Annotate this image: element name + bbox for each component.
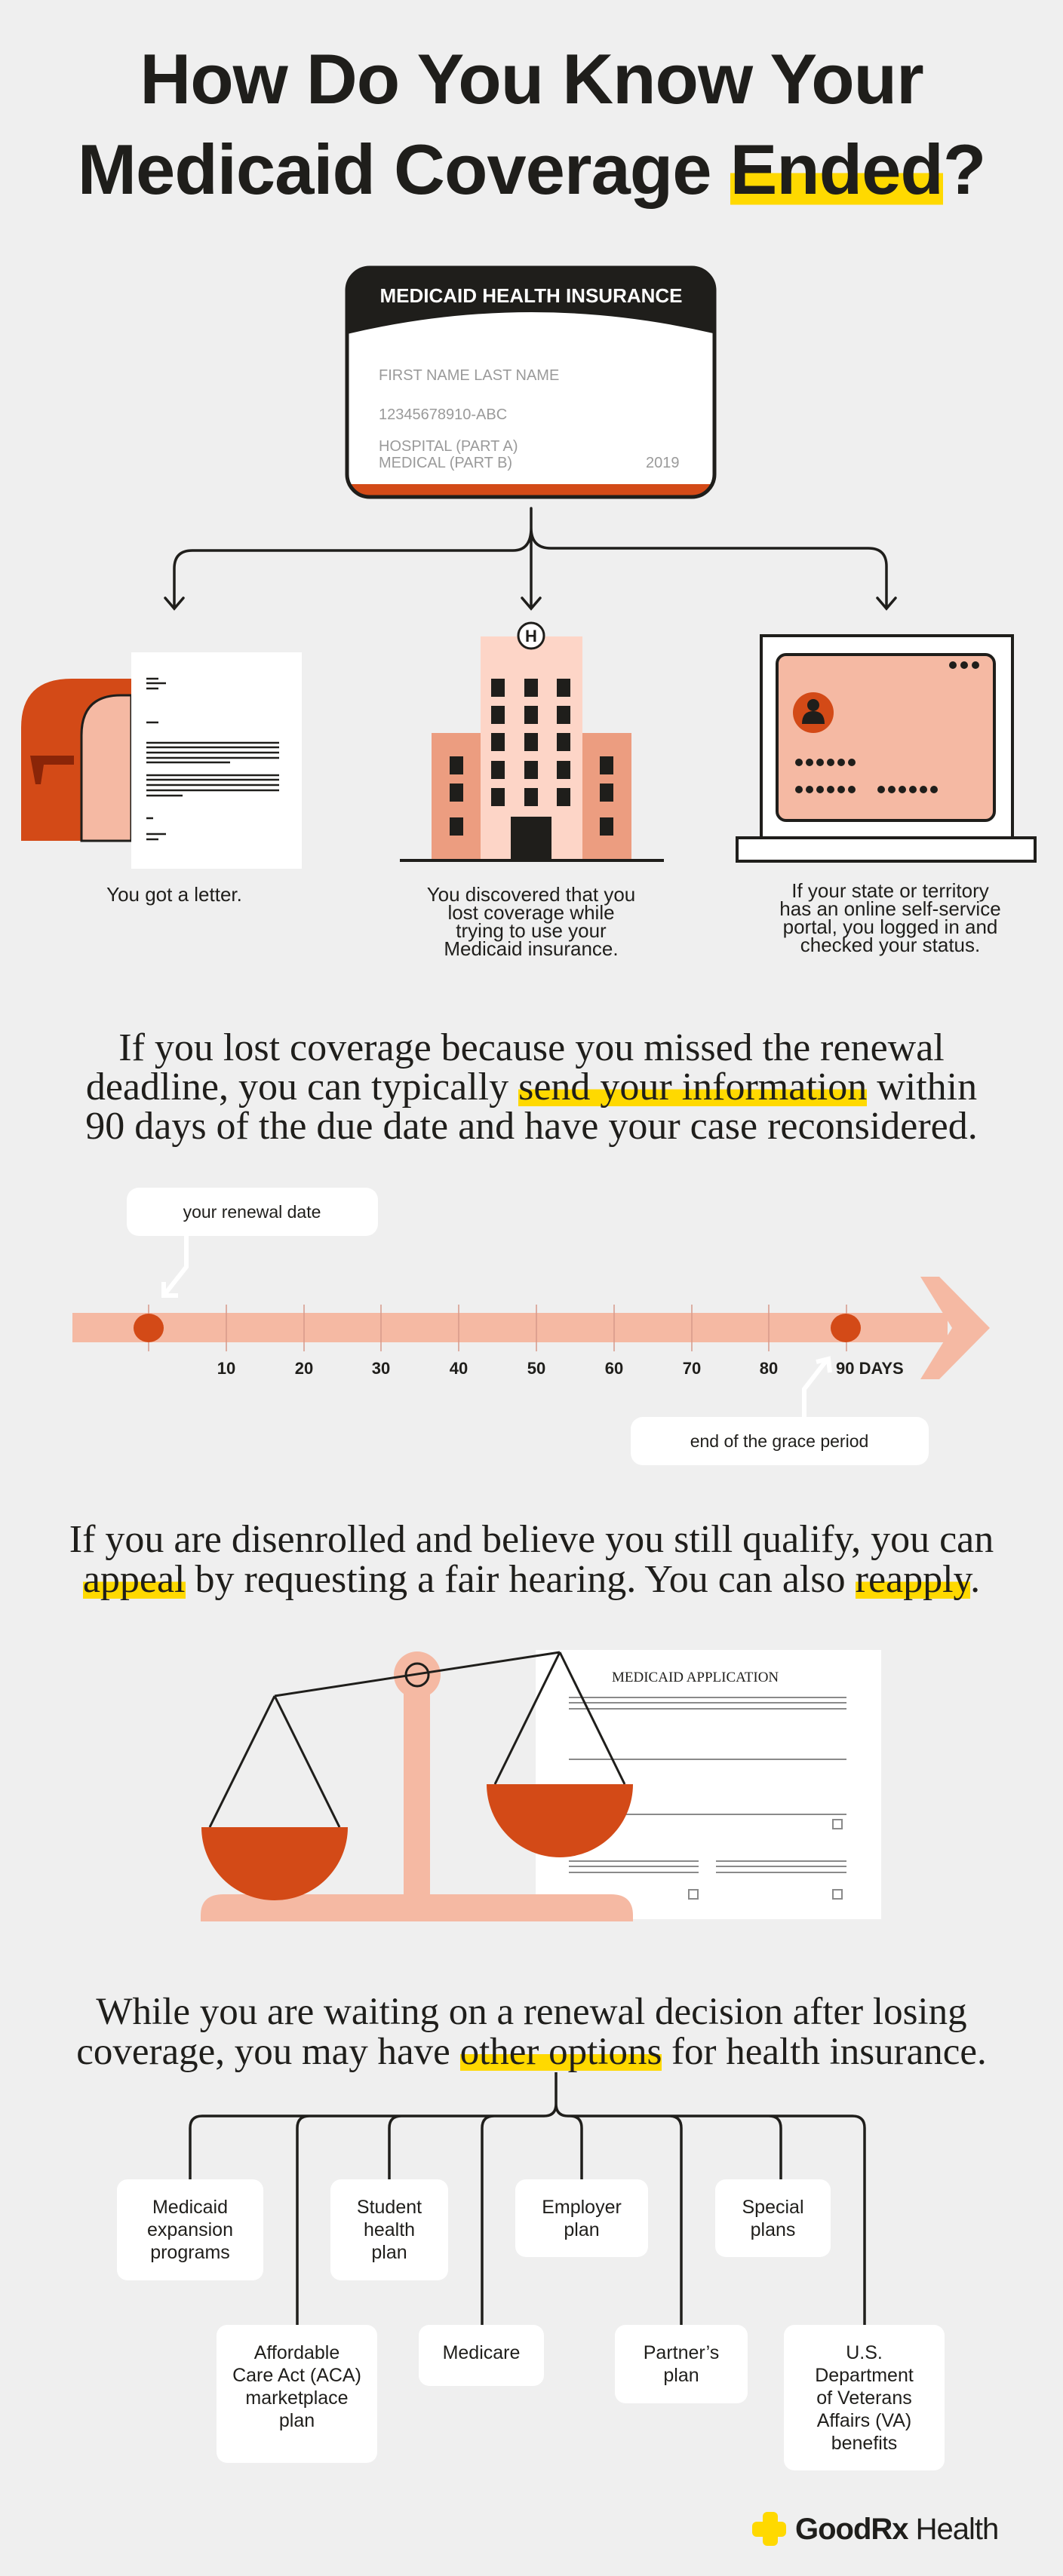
caption: letter: You got a letter.: [106, 883, 242, 906]
caption: portal: portal, you logged in and: [783, 915, 997, 938]
icon: mailbox and letter: [21, 652, 302, 869]
text: renewal deadline: deadline, you can typically send your information within: [86, 1066, 977, 1109]
option boxes: [117, 2179, 945, 2470]
option: VA benefits: Department: [815, 2365, 914, 2386]
callout: your renewal date: your renewal date: [183, 1202, 321, 1222]
option: Special plans: Special: [742, 2197, 804, 2218]
caption: hospital: trying to use your: [456, 919, 607, 942]
option: ACA marketplace: Affordable: [254, 2342, 339, 2363]
insurance card: FIRST NAME LAST NAME: [379, 367, 559, 384]
option: Medicaid expansion: programs: [150, 2242, 230, 2263]
text: renewal deadline: 90 days of the due date and have your case reconsidered.: [85, 1105, 978, 1148]
option: Medicaid expansion: [117, 2179, 263, 2280]
option: ACA marketplace: [217, 2325, 377, 2463]
caption: portal: has an online self-service: [779, 897, 1001, 920]
text: renewal deadline: If you lost coverage because you missed the renewal: [118, 1026, 945, 1069]
timeline arrow: 50: [527, 1359, 545, 1378]
option: VA benefits: of Veterans: [816, 2387, 912, 2409]
caption: hospital: You discovered that you: [427, 883, 635, 906]
insurance card: [346, 265, 717, 499]
timeline arrow: 90 DAYS: [836, 1359, 904, 1378]
title: Medicaid Coverage Ended?: [78, 130, 985, 209]
option: Student health plan: plan: [371, 2242, 407, 2263]
option: VA benefits: benefits: [831, 2433, 897, 2454]
timeline arrow: 20: [295, 1359, 313, 1378]
option: ACA marketplace: marketplace: [245, 2387, 349, 2409]
option: ACA marketplace: Care Act (ACA): [232, 2365, 361, 2386]
insurance card: 12345678910-ABC: [379, 406, 507, 423]
icon: hospital: H: [525, 627, 537, 646]
text: renewal deadline: [85, 1026, 978, 1148]
option: Partner's plan: Partner’s: [644, 2342, 719, 2363]
icon: laptop portal: [737, 636, 1035, 861]
insurance card: 2019: [646, 455, 679, 471]
title: How Do You Know Your: [140, 39, 923, 118]
timeline arrow: 40: [450, 1359, 468, 1378]
callout: your renewal date: [127, 1188, 378, 1296]
callout: end of the grace period: end of the grace period: [690, 1431, 868, 1451]
text: appeal: [69, 1518, 994, 1601]
text: other options: coverage, you may have other options for health insurance.: [76, 2031, 987, 2073]
icon: hospital: [400, 623, 664, 860]
logo mark: [752, 2512, 786, 2546]
option: Student health plan: [330, 2179, 448, 2280]
insurance card: MEDICAL (PART B): [379, 455, 512, 471]
timeline arrow: 60: [605, 1359, 623, 1378]
timeline arrow: [72, 1277, 990, 1379]
insurance card: HOSPITAL (PART A): [379, 438, 518, 455]
option: Partner's plan: plan: [663, 2365, 699, 2386]
medicaid application document: [536, 1650, 881, 1919]
caption: portal: [779, 879, 1001, 956]
timeline arrow: 10: [217, 1359, 235, 1378]
callout: end of the grace period: [631, 1359, 929, 1465]
option: Medicare: Medicare: [443, 2342, 520, 2363]
option: VA benefits: U.S.: [846, 2342, 883, 2363]
arrows: card to three scenarios: [165, 508, 896, 609]
option: VA benefits: [784, 2325, 945, 2470]
insurance card: MEDICAID HEALTH INSURANCE: [379, 284, 683, 307]
option: Medicare: [419, 2325, 544, 2386]
text: appeal: If you are disenrolled and believe you still qualify, you can: [69, 1518, 994, 1561]
option: Student health plan: Student: [357, 2197, 422, 2218]
caption: hospital: [427, 883, 635, 960]
option: Student health plan: health: [364, 2219, 415, 2240]
timeline arrow: 80: [760, 1359, 778, 1378]
medicaid application document: MEDICAID APPLICATION: [612, 1670, 779, 1685]
icon: balance scale: [201, 1651, 633, 1921]
timeline arrow: 30: [372, 1359, 390, 1378]
caption: portal: If your state or territory: [791, 879, 989, 902]
option: Employer plan: Employer: [542, 2197, 622, 2218]
option: VA benefits: Affairs (VA): [817, 2410, 911, 2431]
option: Special plans: plans: [751, 2219, 795, 2240]
option: ACA marketplace: plan: [279, 2410, 315, 2431]
caption: hospital: Medicaid insurance.: [444, 937, 619, 960]
tree connectors to options: [190, 2072, 865, 2325]
option: Medicaid expansion: Medicaid: [152, 2197, 228, 2218]
logo text: GoodRx Health: [795, 2513, 998, 2546]
text: other options: While you are waiting on a renewal decision after losing: [96, 1991, 967, 2033]
caption: portal: checked your status.: [800, 934, 980, 956]
option: Medicaid expansion: expansion: [147, 2219, 233, 2240]
text: other options: [76, 1991, 987, 2073]
option: Employer plan: plan: [564, 2219, 600, 2240]
title: [78, 39, 985, 209]
text: appeal: appeal by requesting a fair hearing. You can also reapply.: [83, 1558, 980, 1601]
option: Partner's plan: [615, 2325, 748, 2403]
timeline arrow: 70: [683, 1359, 701, 1378]
option: Employer plan: [515, 2179, 648, 2257]
caption: hospital: lost coverage while: [447, 901, 615, 924]
option: Special plans: [715, 2179, 831, 2257]
